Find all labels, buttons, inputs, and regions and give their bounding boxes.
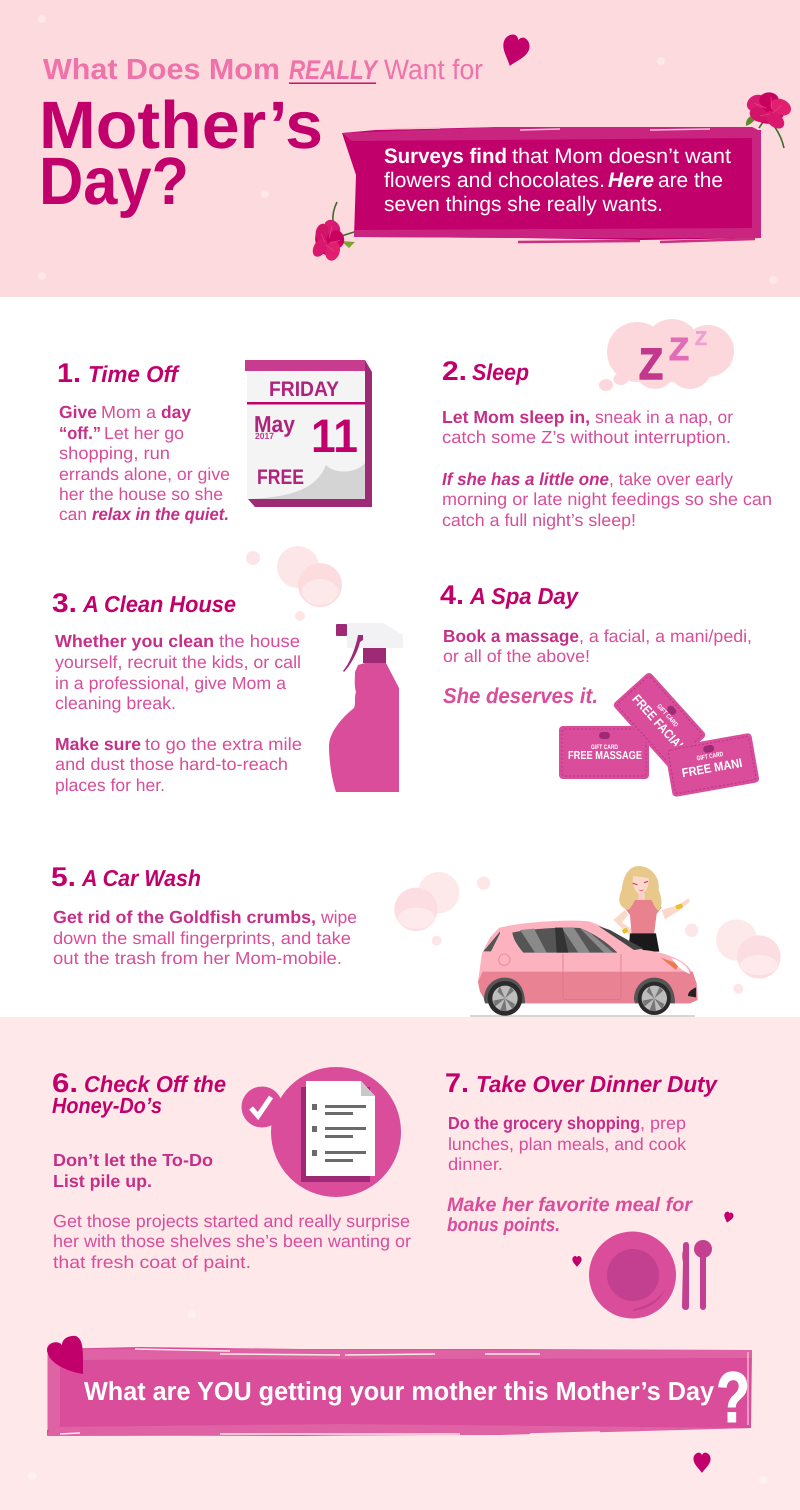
item 5: a car wash: Get rid of the Goldfish crumbs, [53, 907, 316, 927]
icon: heart [497, 32, 532, 70]
item 2: sleep: Sleep [472, 359, 529, 385]
icon: small heart left [572, 1256, 582, 1267]
item 3: a clean house: the house [219, 631, 300, 651]
icon: calendar: FRIDAY [269, 378, 339, 401]
item 6: check off the honey-do's: Honey-Do’s [52, 1093, 162, 1118]
item 3: a clean house: places for her. [55, 775, 165, 795]
icon: gift card free massage [559, 726, 649, 779]
car body [478, 921, 698, 1003]
item 1: time off: shopping, run [59, 443, 170, 463]
item 3: a clean house: cleaning break. [55, 693, 176, 713]
item 7: take over dinner duty: lunches, plan meals, and cook [448, 1134, 686, 1154]
icon: gift card free facial: GIFT CARD [655, 703, 679, 729]
item 6: check off the honey-do's: 6. [52, 1068, 78, 1098]
wheels [484, 978, 525, 1003]
icon: sleep cloud: Z [669, 331, 689, 367]
item 1: time off: can [59, 504, 87, 524]
icon: gift card free facial: FREE FACIAL [629, 691, 689, 755]
item 3: a clean house: and dust those hard-to-reach [55, 754, 288, 774]
item 3: a clean house [52, 588, 302, 795]
bubbles around car [394, 872, 781, 994]
intro banner: Surveys find [384, 145, 507, 168]
icon: flower top right [744, 91, 794, 148]
item 6: check off the honey-do's: her with those shelves she’s been wanting or [53, 1231, 411, 1251]
intro banner: Here [608, 169, 654, 192]
item 3: a clean house: to go the extra mile [145, 734, 302, 754]
title [39, 54, 483, 219]
bubbles [246, 546, 342, 621]
item 1: time off: day [161, 402, 191, 422]
intro banner: are the [658, 169, 723, 192]
item 1: time off: Let her go [104, 423, 184, 443]
item 3: a clean house: A Clean House [82, 591, 236, 617]
intro banner: seven things she really wants. [384, 193, 663, 216]
item 6: check off the honey-do's [52, 1068, 411, 1272]
item 7: take over dinner duty: bonus points. [447, 1215, 560, 1236]
item 3: a clean house: Make sure [55, 734, 141, 754]
item 2: sleep: catch a full night’s sleep! [442, 510, 636, 530]
item 1: time off: “off.” [59, 423, 101, 443]
icon: sleep cloud: Z [695, 328, 707, 350]
item 4: a spa day: A Spa Day [469, 583, 579, 609]
icon: calendar: May [254, 411, 295, 437]
item 2: sleep: catch some Z’s without interruption. [442, 427, 731, 447]
icon: checklist [242, 1067, 401, 1197]
icon: sleep cloud: Z [639, 340, 663, 389]
item 4: a spa day: Book a massage [443, 626, 579, 646]
item 6: check off the honey-do's: that fresh coat of paint. [53, 1252, 251, 1272]
title: Mother’s [39, 88, 323, 163]
item 1: time off: Time Off [88, 361, 180, 387]
item 6: check off the honey-do's: Get those projects started and really surprise [53, 1211, 410, 1231]
item 5: a car wash: A Car Wash [81, 865, 201, 891]
shadow [470, 1014, 695, 1017]
title: Want for [384, 54, 483, 85]
item 2: sleep: Let Mom sleep in, [442, 407, 590, 427]
icon: gift card free facial [612, 671, 707, 769]
item 3: a clean house: Whether you clean [55, 631, 214, 651]
item 2: sleep: If she has a little one [442, 469, 609, 489]
item 1: time off: her the house so she [59, 484, 223, 504]
icon: bottom heart [693, 1453, 711, 1473]
item 5: a car wash: out the trash from her Mom-mobile. [53, 948, 342, 968]
intro banner: flowers and chocolates. [384, 169, 605, 192]
title: What Does Mom [43, 54, 280, 86]
item 7: take over dinner duty: , prep [640, 1113, 686, 1133]
item 5: a car wash: 5. [51, 862, 76, 892]
title: REALLY [289, 55, 379, 85]
item 7: take over dinner duty: 7. [445, 1068, 469, 1098]
item 4: a spa day [440, 580, 752, 708]
icon: gift card free mani [664, 733, 760, 797]
item 3: a clean house: 3. [52, 588, 77, 618]
icon: calendar [245, 360, 372, 507]
item 6: check off the honey-do's: Don’t let the To-Do [53, 1150, 213, 1170]
closing banner: What are YOU getting your mother this Mother’s Day [84, 1376, 715, 1406]
lower section background [0, 1017, 800, 1510]
item 7: take over dinner duty: Do the grocery shopping [448, 1113, 640, 1133]
intro banner [342, 127, 761, 242]
icon: calendar: 11 [311, 409, 358, 462]
illustration: woman and car [470, 866, 698, 1016]
item 5: a car wash [51, 862, 357, 968]
item 1: time off [57, 358, 230, 524]
icon: banner heart [47, 1336, 83, 1374]
item 7: take over dinner duty: dinner. [448, 1154, 503, 1174]
item 4: a spa day: or all of the above! [443, 646, 590, 666]
item 4: a spa day: , a facial, a mani/pedi, [579, 626, 752, 646]
icon: flower bottom left [304, 202, 355, 267]
item 3: a clean house: yourself, recruit the kids, or call [55, 652, 301, 672]
icon: small heart right [723, 1211, 734, 1224]
item 2: sleep: sneak in a nap, or [595, 407, 733, 427]
icon: spray bottle [329, 623, 403, 792]
item 7: take over dinner duty: Take Over Dinner Duty [476, 1071, 718, 1097]
icon: gift card free massage: GIFT CARD [591, 744, 618, 751]
item 1: time off: Mom a [101, 402, 156, 422]
item 4: a spa day: She deserves it. [443, 684, 598, 708]
icon: gift card free mani: FREE MANI [681, 756, 743, 780]
item 2: sleep [442, 356, 772, 530]
item 1: time off: 1. [57, 358, 81, 388]
item 1: time off: Give [59, 402, 97, 422]
icon: calendar: FREE [257, 466, 304, 489]
item 5: a car wash: wipe [320, 907, 357, 927]
item 3: a clean house: in a professional, give Mom a [55, 673, 286, 693]
icon: gift card free mani: GIFT CARD [696, 751, 724, 763]
item 7: take over dinner duty [445, 1068, 718, 1236]
icon: gift card free massage: FREE MASSAGE [568, 750, 642, 762]
header background [0, 0, 800, 297]
item 2: sleep: , take over early [609, 469, 733, 489]
icon: calendar: 2017 [255, 431, 274, 441]
closing banner: ? [716, 1358, 750, 1438]
title: Day? [39, 144, 189, 219]
item 5: a car wash: down the small fingerprints, and take [53, 928, 351, 948]
item 6: check off the honey-do's: List pile up. [53, 1171, 152, 1191]
icon: sleep cloud [599, 319, 734, 391]
item 2: sleep: morning or late night feedings so she can [442, 489, 772, 509]
woman [613, 866, 690, 952]
item 2: sleep: 2. [442, 356, 467, 386]
item 1: time off: errands alone, or give [59, 464, 230, 484]
icon: plate and cutlery [589, 1232, 712, 1318]
item 6: check off the honey-do's: Check Off the [84, 1071, 226, 1097]
closing banner [47, 1347, 752, 1438]
item 1: time off: relax in the quiet. [92, 504, 229, 524]
item 4: a spa day: 4. [440, 580, 464, 610]
intro banner: that Mom doesn’t want [512, 145, 731, 168]
item 7: take over dinner duty: Make her favorite meal for [447, 1194, 693, 1216]
